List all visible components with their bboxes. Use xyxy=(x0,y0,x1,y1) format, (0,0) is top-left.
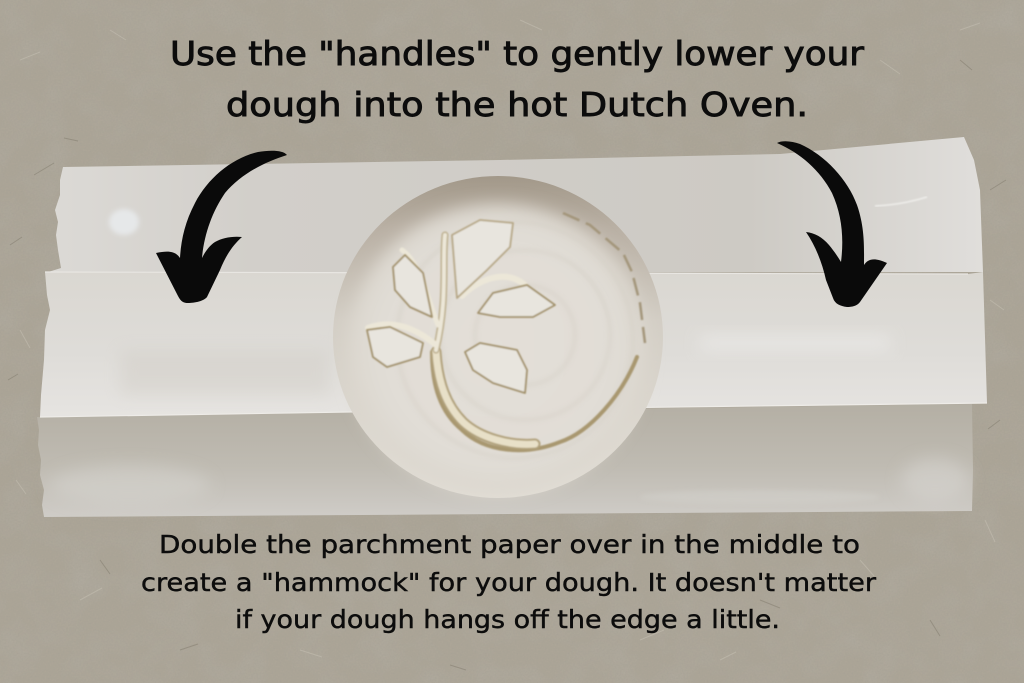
heading: Use the "handles" to gently lower your xyxy=(170,34,864,73)
heading xyxy=(170,34,864,124)
parchment: folded hammock band xyxy=(40,272,987,417)
caption xyxy=(141,530,877,634)
scored leaves xyxy=(367,220,555,393)
caption: Double the parchment paper over in the middle to xyxy=(159,530,860,559)
arrow: right, pointing down to handle xyxy=(777,141,887,307)
caption: if your dough hangs off the edge a little. xyxy=(235,605,780,634)
caption: create a "hammock" for your dough. It doesn't matter xyxy=(141,568,877,597)
heading: dough into the hot Dutch Oven. xyxy=(226,85,808,124)
arrow: left, pointing down to handle xyxy=(156,151,287,303)
parchment: bottom handle sheet xyxy=(37,404,973,517)
scored rim dashes xyxy=(563,213,645,343)
parchment: top handle sheet xyxy=(45,137,983,273)
scored ridges between leaves xyxy=(368,235,525,350)
scored stem xyxy=(432,352,637,450)
sourdough loaf with scored leaf pattern xyxy=(333,176,663,498)
